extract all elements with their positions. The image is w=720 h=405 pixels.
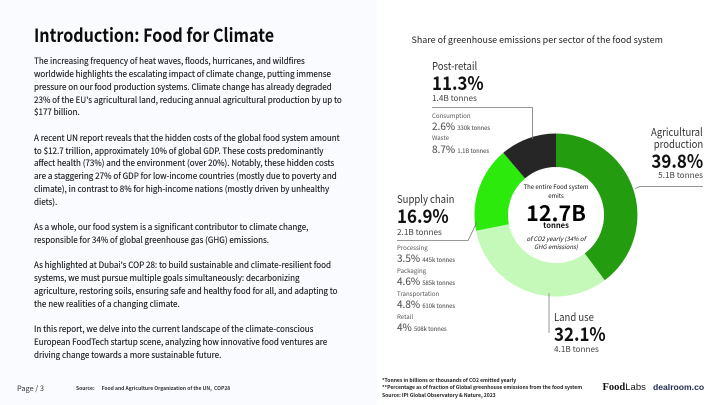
paragraph 2: diets).	[34, 196, 57, 208]
paragraph 2: are a staggering 27% of GDP for low-income countries (mostly due to poverty and	[34, 170, 337, 182]
paragraph 4: As highlighted at Dubai's COP 28: to build sustainable and climate-resilient food	[34, 258, 331, 270]
title: Introduction: Food for Climate	[34, 22, 274, 48]
paragraph 3	[34, 220, 308, 246]
paragraph 5	[34, 322, 327, 360]
label: supply chain: 16.9%	[397, 202, 449, 229]
breakdown: supply chain: 3.5% 445k tonnes	[397, 250, 455, 264]
paragraph 2: climate), in contrast to 8% for high-income nations (mostly driven by unhealthy	[34, 183, 329, 195]
donut centre label: 12.7B	[526, 196, 586, 228]
logo: FoodLabs: FoodLabs	[602, 382, 646, 393]
footnotes	[382, 376, 582, 399]
breakdown: supply chain	[397, 243, 455, 334]
label: land use: 32.1%	[554, 320, 606, 347]
paragraph 5: driving change towards a more sustainable future.	[34, 348, 221, 360]
paragraph 5: In this report, we delve into the current landscape of the climate-conscious	[34, 322, 313, 334]
paragraph 4: the new realities of a changing climate.	[34, 298, 180, 310]
label: agricultural production: 39.8%	[651, 147, 703, 174]
breakdown: supply chain: 4% 508k tonnes	[397, 318, 447, 334]
paragraph 1	[34, 55, 342, 118]
label: supply chain	[397, 191, 454, 238]
paragraph 1: pressure on our food production systems. Climate change has already degraded	[34, 81, 332, 93]
donut centre label: tonnes	[543, 220, 569, 231]
label: post-retail: Post-retail	[432, 58, 477, 74]
breakdown: supply chain: Packaging	[397, 266, 426, 275]
label: land use: 4.1B tonnes	[554, 343, 599, 355]
paragraph 1: $177 billion.	[34, 106, 80, 118]
breakdown: supply chain: Retail	[397, 312, 413, 321]
breakdown: supply chain: Transportation	[397, 289, 439, 298]
paragraph 4	[34, 258, 338, 310]
breakdown: supply chain: 4.8% 610k tonnes	[397, 296, 455, 310]
donut centre label: of CO2 yearly (34% of	[526, 234, 586, 242]
label: supply chain: Supply chain	[397, 191, 454, 207]
label: agricultural production	[651, 124, 703, 181]
label: supply chain: 2.1B tonnes	[397, 226, 442, 238]
breakdown: supply chain: Processing	[397, 243, 428, 252]
chart title: Share of greenhouse emissions per sector of the food system	[412, 33, 663, 46]
breakdown: post-retail: 8.7% 1.1B tonnes	[432, 140, 489, 156]
label: post-retail	[432, 58, 484, 104]
paragraph 5: European FoodTech startup scene, analyzing how innovative food ventures are	[34, 336, 327, 348]
label: agricultural production: Agricultural	[651, 124, 703, 140]
label: agricultural production: production	[654, 136, 703, 152]
breakdown: supply chain: 4.6% 585k tonnes	[397, 272, 455, 288]
footnotes: *Tonnes in billions or thousands of CO2 emitted yearly	[382, 376, 516, 384]
breakdown: post-retail: Waste	[432, 133, 449, 142]
page number: Page / 3	[17, 383, 44, 394]
footnotes: **Percentage as of fraction of Global greenhouse emissions from the food system	[382, 384, 582, 391]
paragraph 1: worldwide highlights the escalating impact of climate change, putting immense	[34, 68, 331, 80]
paragraph 2: to $12.7 trillion, approximately 10% of global GDP. These costs predominantly	[34, 145, 323, 157]
paragraph 4: agriculture, restoring soils, ensuring safe and healthy food for all, and adapting to	[34, 284, 338, 296]
breakdown: post-retail	[432, 110, 490, 156]
paragraph 3: As a whole, our food system is a significant contributor to climate change,	[34, 220, 308, 232]
label: agricultural production: 5.1B tonnes	[658, 169, 703, 181]
paragraph 3: responsible for 34% of global greenhouse gas (GHG) emissions.	[34, 234, 269, 246]
paragraph 2	[34, 132, 340, 208]
paragraph 2: A recent UN report reveals that the hidden costs of the global food system amount	[34, 132, 340, 144]
breakdown: post-retail: Consumption	[432, 110, 471, 120]
donut centre label: GHG emissions)	[534, 242, 578, 250]
footnotes: Source: IPI Global Observatory & Nature, 2023	[382, 392, 496, 399]
panel: introduction text	[0, 0, 377, 405]
paragraph 1: 23% of the EU's agricultural land, reducing annual agricultural production by up to	[34, 94, 342, 106]
paragraph 1: The increasing frequency of heat waves, floods, hurricanes, and wildfires	[34, 55, 305, 67]
label: land use	[554, 309, 606, 355]
label: land use: Land use	[554, 309, 594, 325]
donut centre label	[524, 182, 588, 250]
donut centre label: emits	[548, 190, 564, 200]
breakdown: post-retail: 2.6% 330k tonnes	[432, 118, 490, 133]
source note: Source: Food and Agriculture Organization of the UN, COP28	[76, 384, 230, 392]
label: post-retail: 11.3%	[432, 69, 484, 96]
logo: dealroom.co: dealroom.co	[653, 382, 704, 392]
paragraph 2: affect health (73%) and the environment (over 20%). Notably, these hidden costs	[34, 157, 334, 169]
donut centre label: The entire Food system	[524, 182, 588, 191]
label: post-retail: 1.4B tonnes	[432, 92, 477, 104]
paragraph 4: systems, we must pursue multiple goals simultaneously: decarbonizing	[34, 272, 300, 284]
